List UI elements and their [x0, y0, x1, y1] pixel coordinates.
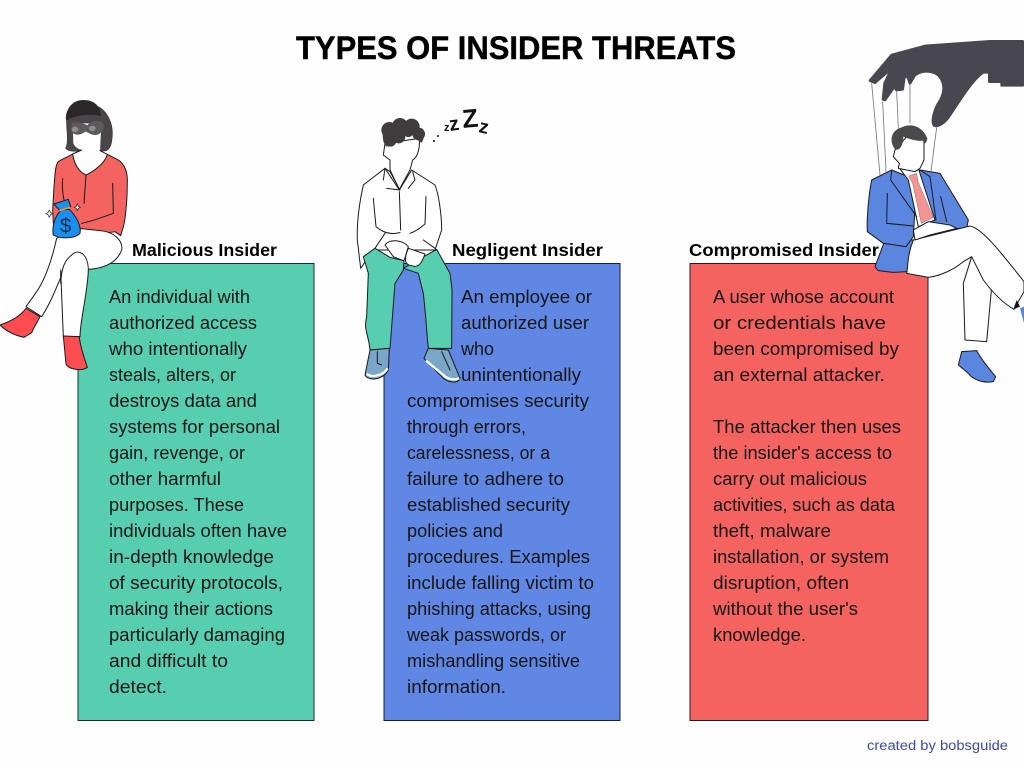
heading: malicious insider: Malicious Insider: [132, 240, 277, 260]
panel: compromised insider: [689, 240, 928, 720]
text block: negligent description: authorized user: [461, 313, 589, 333]
icon: sleeping zzz: z: [477, 116, 491, 139]
text block: malicious description: authorized access: [109, 313, 257, 333]
text block: malicious description: gain, revenge, or: [109, 443, 245, 463]
text block: negligent description: information.: [407, 677, 506, 697]
illustration: sleepy man sitting: [357, 118, 460, 382]
text block: compromised description: an external attacker.: [713, 365, 885, 385]
text block: malicious description: making their actions: [109, 599, 273, 619]
icon: money bag: $: [60, 215, 72, 238]
text block: compromised description: carry out malicious: [713, 469, 867, 489]
text block: compromised description: theft, malware: [713, 521, 831, 541]
text block: compromised description: without the user's: [712, 599, 858, 619]
text block: negligent description: include falling victim to: [407, 573, 594, 593]
text block: negligent description: established security: [407, 495, 570, 515]
credit text: created by bobsguide: [867, 738, 1008, 753]
text block: compromised description: installation, or system: [713, 547, 889, 567]
text block: negligent description: phishing attacks, using: [407, 599, 591, 619]
text block: compromised description: the insider's access to: [713, 443, 892, 463]
text block: compromised description: activities, such as data: [713, 495, 896, 515]
text block: compromised description: knowledge.: [713, 625, 806, 645]
text block: malicious description: and difficult to: [109, 651, 228, 671]
text block: malicious description: destroys data and: [109, 391, 257, 411]
text block: negligent description: compromises security: [407, 391, 589, 411]
shadow hand: [870, 41, 1023, 126]
illustration: masked woman with money bag: [0, 100, 127, 370]
text block: compromised description: [712, 287, 901, 645]
panel: negligent insider: [384, 240, 620, 720]
icon: money bag: [46, 199, 80, 238]
text block: malicious description: individuals often have: [109, 521, 287, 541]
icon: sleeping zzz: z: [444, 122, 450, 134]
heading: negligent insider: Negligent Insider: [452, 240, 603, 260]
text block: negligent description: unintentionally: [461, 365, 581, 385]
text block: negligent description: policies and: [407, 521, 503, 541]
text block: malicious description: who intentionally: [108, 339, 247, 359]
text block: compromised description: been compromised by: [713, 339, 899, 359]
text block: malicious description: purposes. These: [109, 495, 244, 515]
text block: malicious description: steals, alters, or: [109, 365, 236, 385]
text block: compromised description: disruption, often: [713, 573, 849, 593]
heading: compromised insider: Compromised Insider: [689, 240, 879, 260]
text block: negligent description: through errors,: [407, 417, 526, 437]
illustration: puppet hand with strings: [870, 41, 1023, 175]
icon: sleeping zzz: Z: [461, 103, 479, 134]
text block: malicious description: of security protocols,: [109, 573, 283, 593]
text block: compromised description: A user whose account: [713, 287, 894, 307]
text block: negligent description: who: [460, 339, 494, 359]
text block: malicious description: in-depth knowledge: [109, 547, 274, 567]
text block: malicious description: particularly damaging: [109, 625, 285, 645]
text block: malicious description: [108, 287, 287, 697]
text block: compromised description: or credentials have: [713, 313, 886, 333]
icon: sleeping zzz: [433, 103, 491, 142]
panel: malicious insider: [78, 240, 314, 720]
text block: malicious description: detect.: [109, 677, 167, 697]
text block: negligent description: failure to adhere to: [407, 469, 564, 489]
text block: compromised description: The attacker then uses: [713, 417, 901, 437]
text block: malicious description: systems for personal: [109, 417, 280, 437]
text block: negligent description: An employee or: [461, 287, 592, 307]
title: TYPES OF INSIDER THREATS: [296, 30, 736, 66]
text block: negligent description: weak passwords, or: [406, 625, 566, 645]
panel background: negligent: [384, 264, 620, 720]
text block: negligent description: carelessness, or a: [407, 443, 551, 463]
puppet strings: [872, 83, 937, 175]
text block: negligent description: procedures. Examples: [407, 547, 590, 567]
text block: negligent description: mishandling sensitive: [407, 651, 580, 671]
icon: sleeping zzz: z: [448, 113, 461, 136]
text block: malicious description: other harmful: [109, 469, 221, 489]
illustration: puppet businessman seated: [867, 125, 1024, 382]
text block: malicious description: An individual with: [109, 287, 250, 307]
panel background: malicious: [78, 264, 314, 720]
text block: negligent description: [406, 287, 594, 697]
panel background: compromised: [690, 264, 928, 720]
